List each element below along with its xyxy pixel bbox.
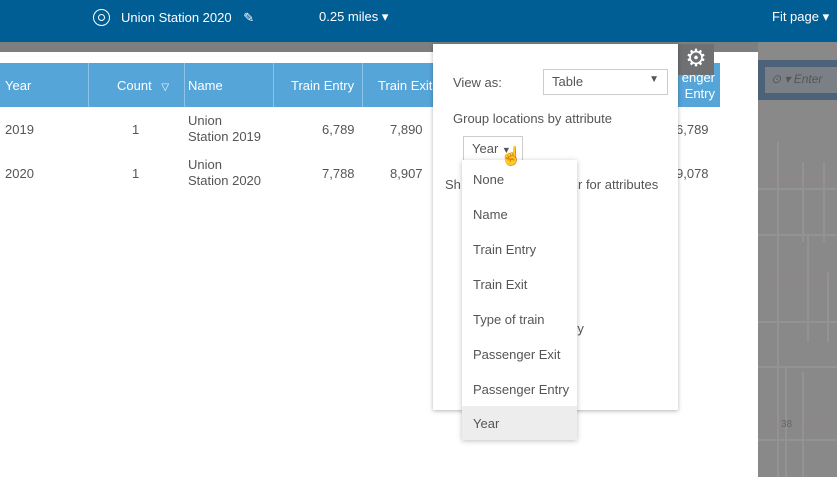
top bar [0,0,837,42]
settings popup [433,44,678,410]
settings popup: ry [573,321,584,336]
dropdown list: Train Exit [473,277,527,292]
view as select: Table [552,74,583,89]
view as select: ▼ [649,74,659,85]
dropdown list: Type of train [473,312,545,327]
table rows: 6,789 [676,122,709,137]
dropdown list: None [473,172,504,187]
dropdown list [462,160,577,440]
map search bar: ⊙ ▾ Enter [771,72,822,86]
map panel [758,42,837,477]
settings popup: Sh [445,177,461,192]
table header: Name [188,78,223,93]
gear button [678,44,714,75]
view as select [543,69,668,95]
map search bar [758,60,837,100]
icon: cursor hand: ☝ [500,146,522,166]
dropdown list: Passenger Entry [473,382,569,397]
dropdown list: Name [473,207,508,222]
dropdown list: Year [473,416,499,431]
table rows: Union [188,157,222,172]
table header: Train Entry [291,78,354,93]
table header: Count ▽ [117,78,169,93]
table rows: 2020 [5,166,34,181]
table rows: Station 2020 [188,173,261,188]
gear button: ⚙ [685,45,707,72]
radius selector: 0.25 miles ▾ [319,9,388,24]
dropdown list: Passenger Exit [473,347,560,362]
table header: Entry [685,86,715,101]
table rows: 7,890 [390,122,423,137]
year select: Year ▼ [472,141,511,156]
table rows: 1 [132,122,139,137]
table rows: Station 2019 [188,129,261,144]
table rows: 8,907 [390,166,423,181]
table header [0,63,720,107]
map panel: 38 [781,419,793,430]
table rows: 9,078 [676,166,709,181]
table rows: 1 [132,166,139,181]
settings popup: r for attributes [578,177,658,192]
fit page: Fit page ▾ [772,9,829,24]
settings popup: View as: [453,75,502,90]
table rows [5,113,709,188]
table rows: 6,789 [322,122,355,137]
table header: enger [682,70,715,85]
icon: target [93,9,110,26]
table header: Year [5,78,31,93]
settings popup: Group locations by attribute [453,111,612,126]
table header: Train Exit [378,78,432,93]
table rows: 7,788 [322,166,355,181]
dropdown list: Train Entry [473,242,536,257]
year select [463,136,523,161]
table rows: 2019 [5,122,34,137]
location title: Union Station 2020 ✎ [121,10,254,25]
table rows: Union [188,113,222,128]
